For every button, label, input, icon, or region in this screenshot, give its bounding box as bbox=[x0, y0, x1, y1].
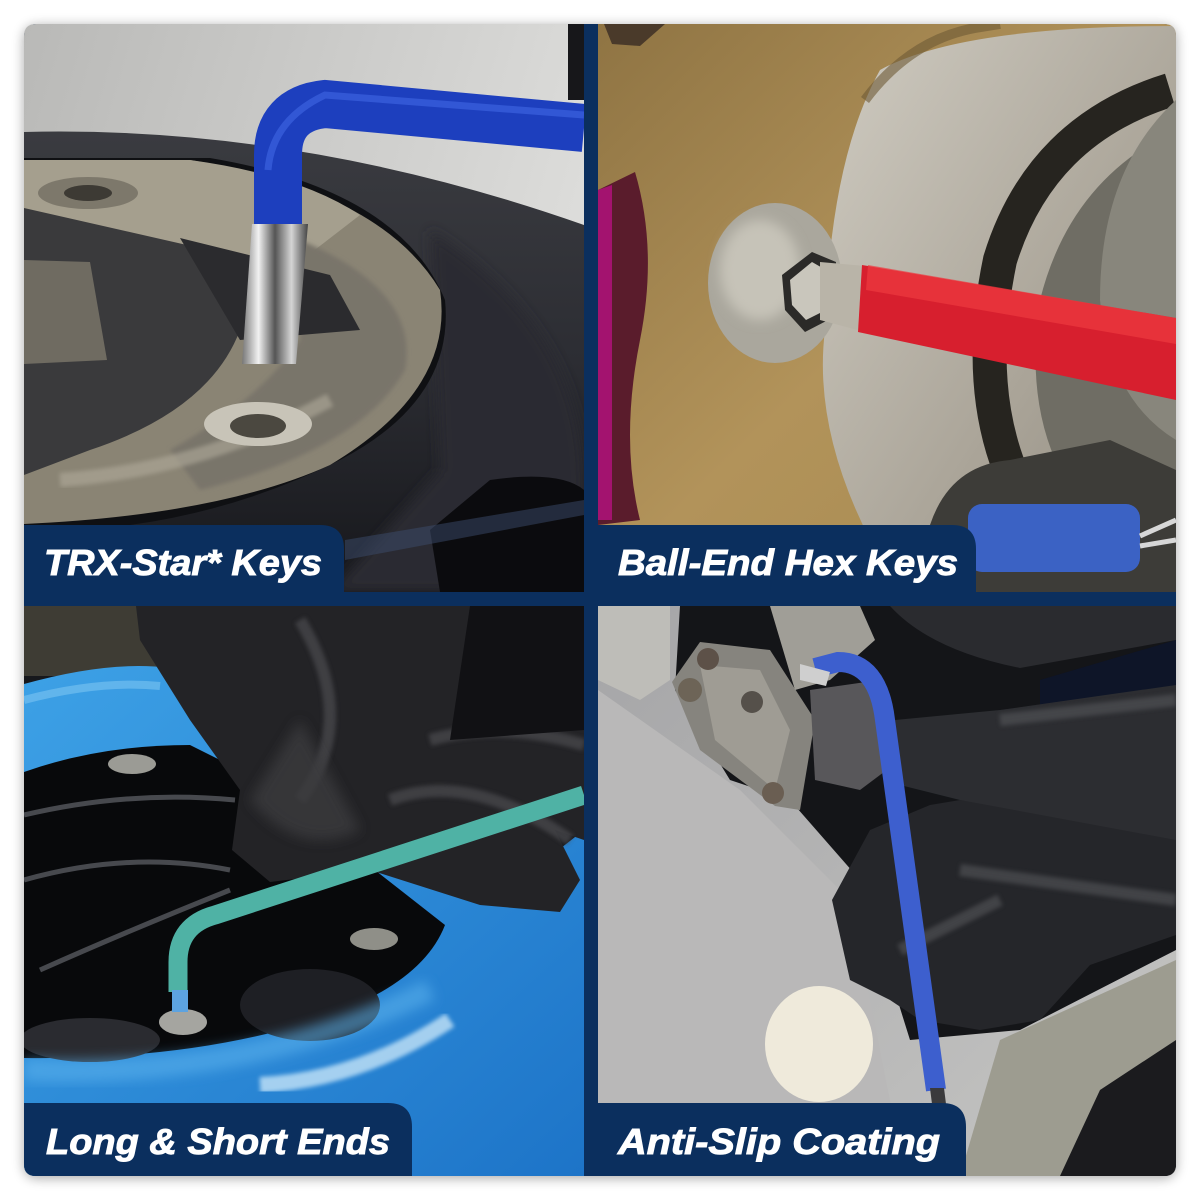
label text: Ball-End Hex Keys: Ball-End Hex Keys bbox=[618, 542, 958, 583]
icon: red ball-end key bbox=[820, 262, 854, 323]
icon: blue TRX key bbox=[278, 104, 584, 228]
panel: ball-end hex keys photo bbox=[598, 24, 1176, 592]
panel: TRX-Star keys photo bbox=[24, 24, 584, 592]
label text: Long and Short Ends: Long & Short Ends bbox=[46, 1121, 390, 1162]
small blue key handle bbox=[968, 504, 1140, 572]
black textured gloves bbox=[895, 685, 1176, 840]
label: Ball-End Hex Keys bbox=[584, 525, 976, 592]
chrome bit bbox=[242, 224, 308, 364]
metal carburetor bbox=[672, 642, 815, 810]
panel: long and short ends photo bbox=[20, 606, 584, 1176]
label: TRX-Star Keys bbox=[24, 525, 344, 592]
panel: anti-slip coating photo bbox=[598, 606, 1176, 1176]
label: Anti-Slip Coating bbox=[584, 1103, 966, 1176]
label: Long and Short Ends bbox=[24, 1103, 412, 1176]
icon: blue long-arm key bbox=[815, 662, 936, 1090]
icon: teal long-arm key bbox=[178, 795, 584, 992]
label text: Anti-Slip Coating: Anti-Slip Coating bbox=[617, 1121, 940, 1162]
black glove bbox=[136, 606, 584, 912]
white cap bbox=[765, 986, 873, 1102]
label text: TRX-Star Keys: TRX-Star* Keys bbox=[44, 542, 322, 583]
